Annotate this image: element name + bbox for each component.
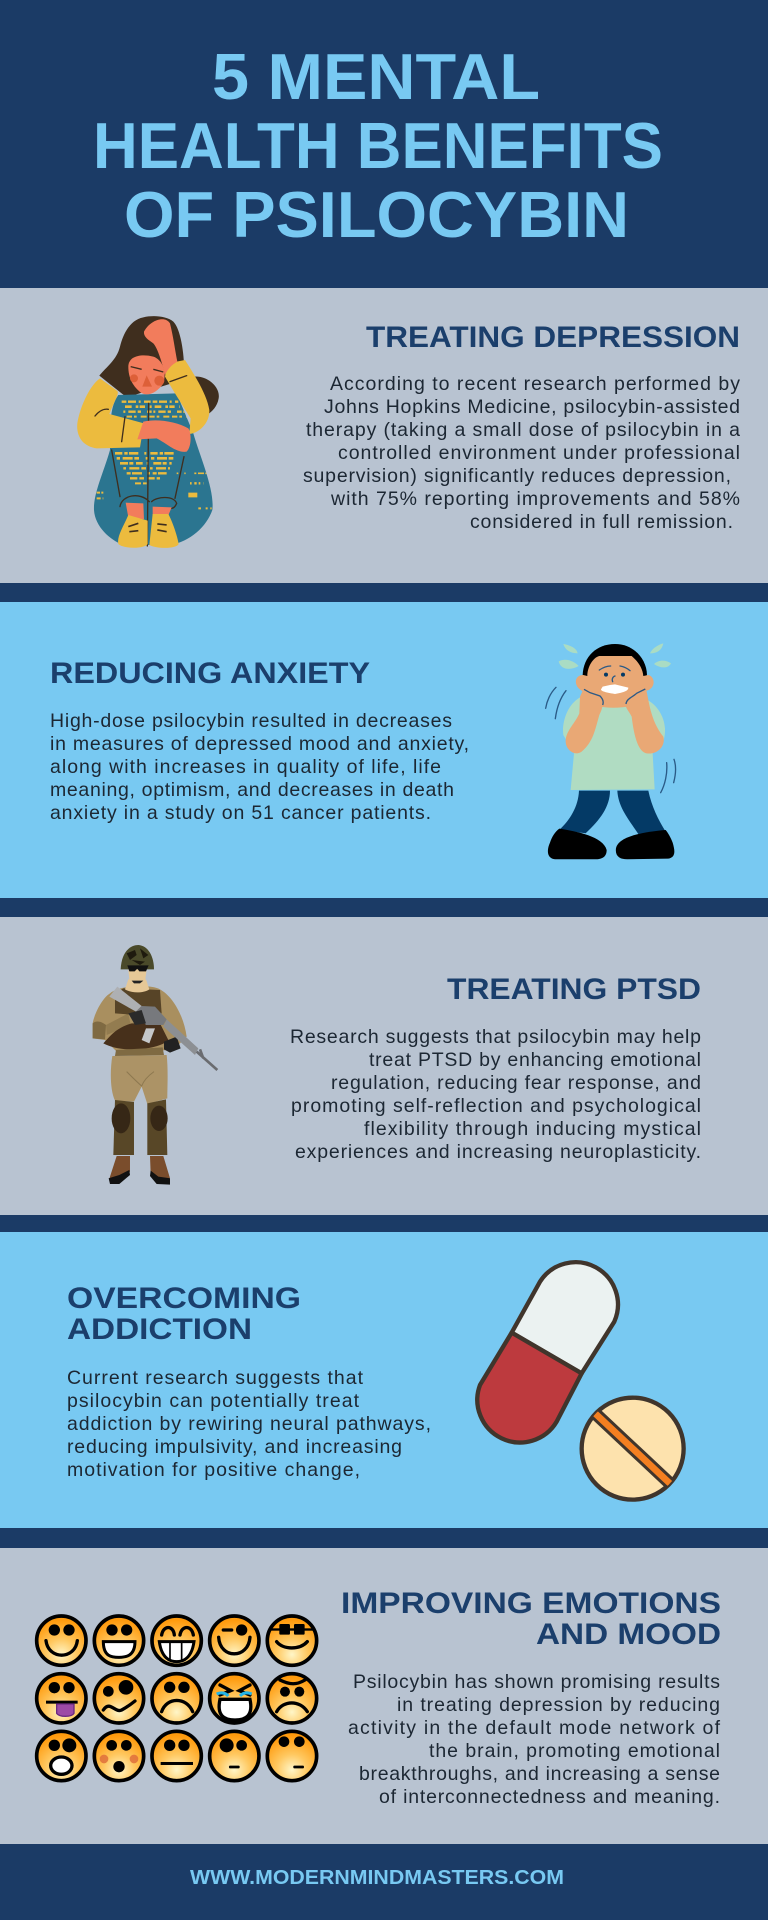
illustration: soldier with rifle (93, 945, 217, 1185)
body text: treating ptsd: promoting self-reflection and psychological (291, 1095, 701, 1117)
body text: overcoming addiction: Current research suggests that (67, 1367, 364, 1389)
body text: treating ptsd: regulation, reducing fear response, and (331, 1072, 701, 1094)
body text: improving emotions and mood: in treating depression by reducing (397, 1694, 720, 1716)
heading: improving emotions and mood (341, 1587, 721, 1651)
panel: overcoming addiction (0, 1232, 768, 1528)
body text: reducing anxiety: High-dose psilocybin resulted in decreases (50, 710, 452, 732)
body text: treating ptsd: experiences and increasing neuroplasticity. (295, 1141, 701, 1163)
body text: treating depression: therapy (taking a small dose of psilocybin in a (306, 419, 740, 441)
body text: treating depression (303, 373, 740, 533)
icon grid: emoticon faces (37, 1616, 317, 1781)
header band (0, 0, 768, 288)
panel: treating depression (0, 288, 768, 583)
body text: treating depression: Johns Hopkins Medicine, psilocybin-assisted (324, 396, 740, 418)
heading: overcoming addiction (67, 1282, 301, 1346)
heading: reducing anxiety: REDUCING ANXIETY (50, 657, 370, 690)
illustration: capsule and tablet (477, 1262, 684, 1500)
capsule (477, 1262, 618, 1442)
body text: improving emotions and mood (348, 1671, 721, 1808)
footer url: WWW.MODERNMINDMASTERS.COM (190, 1867, 564, 1889)
illustration: anxious boy (546, 643, 676, 859)
body text: overcoming addiction: motivation for positive change, (67, 1459, 360, 1481)
body text: improving emotions and mood: activity in the default mode network of (348, 1717, 721, 1739)
body text: improving emotions and mood: Psilocybin has shown promising results (353, 1671, 720, 1693)
body text: treating ptsd: flexibility through inducing mystical (364, 1118, 701, 1140)
body text: treating depression: According to recent research performed by (330, 373, 740, 395)
body text: improving emotions and mood: of interconnectedness and meaning. (379, 1786, 720, 1808)
heading: treating ptsd: TREATING PTSD (447, 973, 701, 1006)
heading: improving emotions and mood: AND MOOD (536, 1618, 721, 1651)
body text: overcoming addiction: reducing impulsivity, and increasing (67, 1436, 402, 1458)
divider band 1 (0, 583, 768, 602)
title: 5 MENTAL (212, 40, 540, 113)
body text: reducing anxiety: meaning, optimism, and decreases in death (50, 779, 454, 801)
body text: treating depression: with 75% reporting improvements and 58% (330, 488, 740, 510)
panel: reducing anxiety (0, 602, 768, 898)
panel: treating ptsd (0, 917, 768, 1215)
divider band 3 (0, 1215, 768, 1232)
body text: treating depression: considered in full remission. (470, 511, 733, 533)
body text: overcoming addiction: addiction by rewiring neural pathways, (67, 1413, 431, 1435)
body text: treating ptsd (290, 1026, 701, 1163)
heading: overcoming addiction: OVERCOMING (67, 1282, 301, 1315)
divider band 4 (0, 1528, 768, 1548)
footer band (0, 1844, 768, 1920)
body text: improving emotions and mood: the brain, promoting emotional (429, 1740, 720, 1762)
title: OF PSILOCYBIN (124, 178, 629, 251)
body text: reducing anxiety: in measures of depressed mood and anxiety, (50, 733, 469, 755)
heading: improving emotions and mood: IMPROVING EMOTIONS (341, 1587, 721, 1620)
tablet (582, 1398, 684, 1500)
title: HEALTH BENEFITS (93, 109, 663, 182)
title (93, 40, 663, 251)
illustration: sad woman hugging knees (77, 316, 219, 548)
divider band 2 (0, 898, 768, 917)
body text: improving emotions and mood: breakthroughs, and increasing a sense (359, 1763, 720, 1785)
heading: overcoming addiction: ADDICTION (67, 1313, 252, 1346)
body text: treating ptsd: treat PTSD by enhancing emotional (369, 1049, 701, 1071)
body text: treating depression: controlled environment under professional (338, 442, 740, 464)
body text: overcoming addiction: psilocybin can potentially treat (67, 1390, 360, 1412)
body text: reducing anxiety: along with increases in quality of life, life (50, 756, 441, 778)
panel: improving emotions and mood (0, 1548, 768, 1844)
body text: reducing anxiety: anxiety in a study on 51 cancer patients. (50, 802, 431, 824)
body text: reducing anxiety (50, 710, 469, 824)
heading: treating depression: TREATING DEPRESSION (366, 321, 740, 354)
body text: overcoming addiction (67, 1367, 431, 1481)
body text: treating depression: supervision) significantly reduces depression, (303, 465, 731, 487)
body text: treating ptsd: Research suggests that psilocybin may help (290, 1026, 701, 1048)
